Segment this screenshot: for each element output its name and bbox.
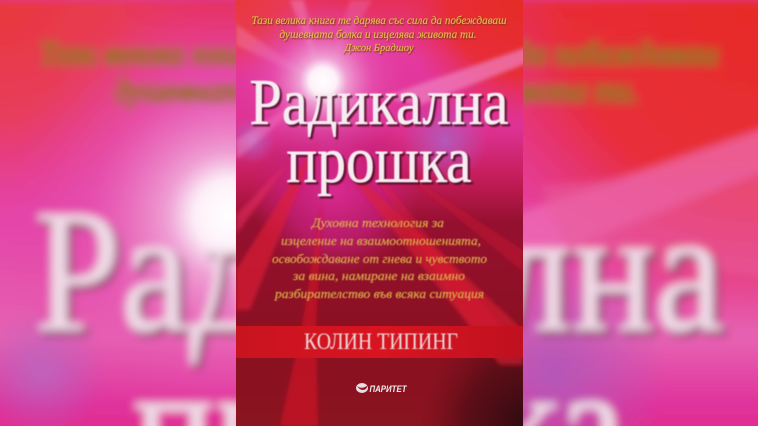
subtitle text: разбирателство във всяка ситуация [274, 286, 484, 301]
panel: book cover [236, 0, 530, 426]
publisher name: ПАРИТЕТ [370, 384, 407, 395]
title: прошка [288, 126, 474, 199]
quote text [252, 13, 507, 55]
blurred enlarged background: душевната болка и изцелява живота ти. [114, 73, 638, 108]
quote text: Джон Брадшоу [344, 42, 414, 54]
icon: publisher logo [356, 383, 368, 393]
title [250, 80, 511, 200]
subtitle text: освобождаване от гнева и чувството [272, 251, 488, 266]
title: Радикална [250, 66, 508, 139]
quote text: Джон Брадшоу [344, 43, 414, 55]
subtitle text [272, 215, 488, 301]
quote text: Тази велика книга те дарява със сила да побеждаваш [252, 14, 507, 28]
subtitle text: за вина, намиране на взаимно [292, 268, 466, 283]
subtitle text: изцеление на взаимоотношенията, [281, 233, 481, 248]
title: прошка [286, 124, 472, 197]
title: Радикална [252, 68, 510, 141]
quote text: Тази велика книга те дарява със сила да побеждаваш [252, 13, 506, 27]
quote text: душевната болка и изцелява живота ти. [280, 27, 476, 41]
cover artwork [236, 0, 530, 426]
subtitle text: Духовна технология за [310, 215, 445, 230]
blurred enlarged background: Тази велика книга те дарява със сила да побеждаваш [40, 36, 718, 71]
author name: КОЛИН ТИПИНГ [304, 329, 458, 354]
quote text: душевната болка и изцелява живота ти. [280, 28, 477, 42]
author band [236, 326, 523, 358]
